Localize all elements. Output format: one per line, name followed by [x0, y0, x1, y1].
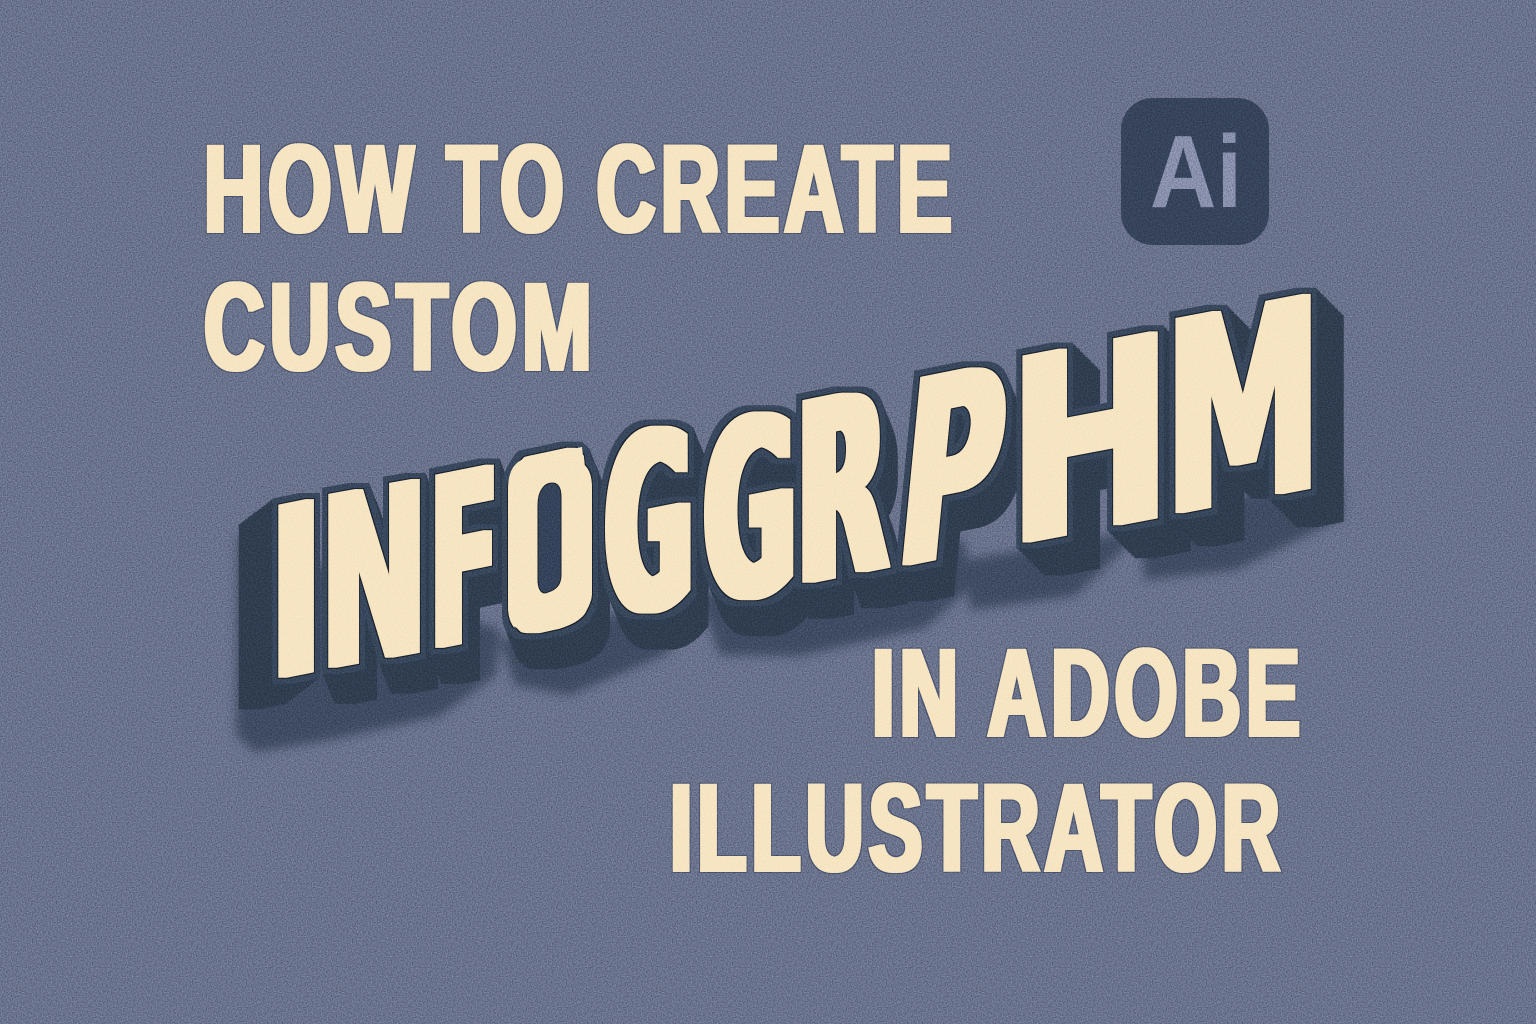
icon: Adobe Illustrator logo: Ai	[1150, 114, 1242, 229]
letter R: R	[798, 336, 887, 643]
icon: Adobe Illustrator logo	[1121, 98, 1269, 245]
letter P: P	[888, 310, 1018, 628]
heading line 3: IN ADOBE	[872, 624, 1305, 763]
heading: in adobe illustrator	[670, 624, 1305, 898]
letter I: I	[269, 452, 324, 736]
second letter G: G	[704, 361, 796, 664]
letter O with slash: Ø	[497, 387, 603, 706]
3D headline word	[238, 288, 1344, 710]
cast shadow of the 3D word	[236, 480, 1342, 752]
heading line 2: CUSTOM	[204, 258, 597, 397]
face and counter of the slashed O	[508, 447, 592, 632]
heading: how to create custom	[204, 120, 957, 397]
heading line 1: HOW TO CREATE	[204, 120, 957, 259]
letter N: N	[320, 431, 428, 725]
letter F: F	[430, 417, 498, 705]
letter H: H	[1008, 278, 1172, 605]
letter G: G	[606, 376, 692, 676]
letter M: M	[1165, 239, 1321, 578]
